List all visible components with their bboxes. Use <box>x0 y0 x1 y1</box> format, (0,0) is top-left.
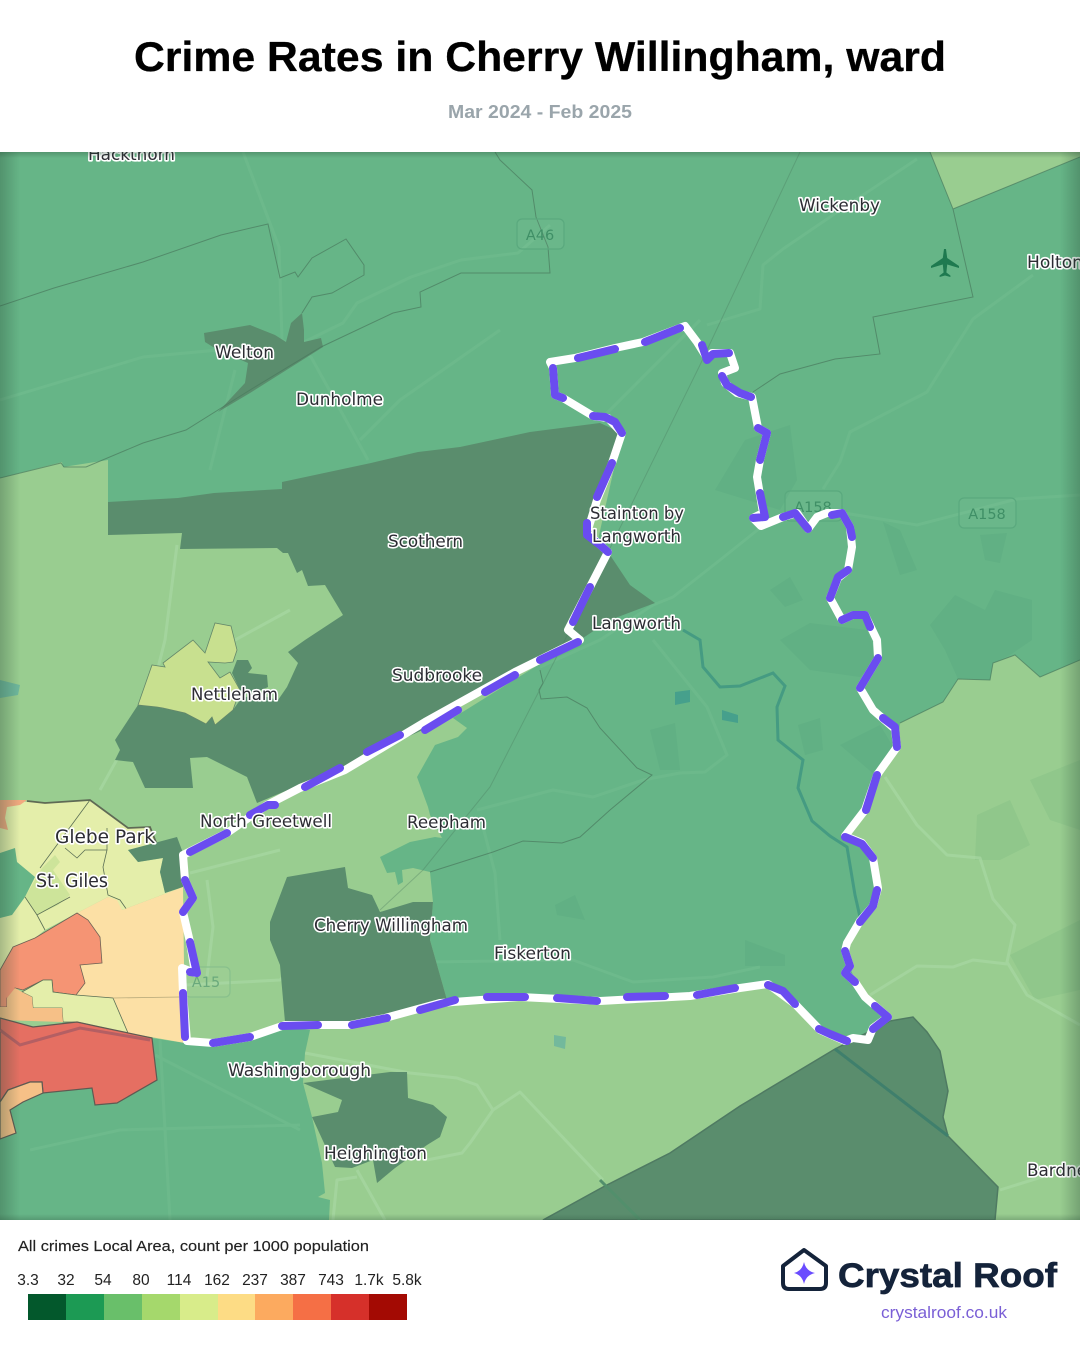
place labels: Dunholme <box>296 390 383 410</box>
place labels: Sudbrooke <box>392 666 482 686</box>
road sign: A46 <box>517 219 564 249</box>
choropleth area: Lincoln lower orange <box>0 1082 43 1139</box>
choropleth area: Lincoln pale yellow wards <box>0 800 183 970</box>
Lincoln outer border <box>27 800 157 845</box>
place labels: Glebe Park <box>55 826 155 848</box>
place labels: Cherry Willingham <box>314 916 468 936</box>
legend scale values: 5.8k <box>392 1272 422 1289</box>
legend scale values: 3.3 <box>17 1272 39 1289</box>
track in triangle <box>600 1180 640 1220</box>
legend scale values <box>17 1272 422 1289</box>
choropleth area: Lincoln orange ward <box>0 988 63 1022</box>
place labels: Langworth <box>592 614 681 634</box>
icon: airport plane <box>931 249 959 277</box>
place labels: Fiskerton <box>494 944 571 964</box>
legend colour bar <box>28 1294 407 1320</box>
legend scale values: 237 <box>242 1272 268 1289</box>
ward boundary <box>182 326 897 1043</box>
road sign: A158 east: A158 <box>968 507 1006 523</box>
cream ward line <box>113 997 180 998</box>
place labels: Reepham <box>407 813 486 833</box>
place labels: Scothern <box>388 532 463 552</box>
choropleth area: St Giles green patch <box>25 855 70 915</box>
place labels: Langworth <box>592 527 681 547</box>
pond south of ward <box>554 1035 566 1049</box>
place labels: Stainton by <box>590 504 684 524</box>
logo: Crystal Roof <box>781 1248 1058 1322</box>
road sign: A15: A15 <box>192 975 220 991</box>
choropleth area: Cherry Willingham <box>270 867 447 1025</box>
legend title: All crimes Local Area, count per 1000 population <box>18 1238 369 1255</box>
place labels: Welton <box>215 343 274 363</box>
place labels <box>36 145 1080 1181</box>
choropleth area: Lincoln teal ward <box>0 848 35 918</box>
legend scale values: 162 <box>204 1272 230 1289</box>
legend <box>17 1238 422 1320</box>
choropleth area: ward fields <box>555 425 1032 966</box>
subtitle: date range: Mar 2024 - Feb 2025 <box>448 101 632 122</box>
choropleth area: top-left orange sliver <box>0 800 27 830</box>
website url: crystalroof.co.uk <box>881 1304 1008 1322</box>
place labels: Nettleham <box>191 685 278 705</box>
legend scale values: 1.7k <box>354 1272 384 1289</box>
choropleth area: Nettleham <box>138 623 240 725</box>
road sign: A46: A46 <box>526 228 554 244</box>
brand name: Crystal Roof <box>838 1257 1058 1295</box>
legend scale values: 743 <box>318 1272 344 1289</box>
choropleth area: east field patches <box>975 760 1080 1000</box>
road sign: A158 east <box>959 498 1016 528</box>
pond on west edge <box>0 680 20 698</box>
roads <box>0 152 1080 1220</box>
place labels: Washingborough <box>228 1061 371 1081</box>
road sign: A158 north: A158 <box>794 500 832 516</box>
railway across triangle <box>835 1049 948 1136</box>
choropleth area: Lincoln dark ward <box>128 837 183 893</box>
choropleth area: low-crime green <box>0 152 1080 1041</box>
legend scale values: 114 <box>167 1272 192 1289</box>
choropleth area: Welton <box>204 313 323 412</box>
choropleth area: south-west green <box>0 1027 330 1220</box>
road sign: A15 <box>185 967 230 997</box>
legend scale values: 387 <box>280 1272 306 1289</box>
road sign: A158 north <box>785 491 842 521</box>
ponds near Langworth <box>675 690 738 723</box>
place labels: North Greetwell <box>200 812 332 832</box>
choropleth area: Lincoln red ward <box>0 1018 157 1105</box>
place labels: Wickenby <box>799 196 880 216</box>
Lincoln ward lines <box>25 800 127 930</box>
choropleth area: Lincoln salmon wards <box>0 913 102 1007</box>
choropleth area: Heighington and Washingborough <box>303 1072 447 1183</box>
legend scale values: 54 <box>94 1272 112 1289</box>
choropleth area: Lincoln pale band <box>22 980 128 1033</box>
river <box>683 630 860 917</box>
legend scale values: 80 <box>132 1272 150 1289</box>
icon: house with star <box>783 1250 826 1289</box>
map panel <box>0 152 1080 1220</box>
roads on light ground <box>100 545 1080 1220</box>
title: Crime Rates in Cherry Willingham, ward <box>134 33 946 80</box>
choropleth area: south-east dark triangle <box>543 1017 998 1220</box>
choropleth area: dark green Scothern and Sudbrooke <box>108 423 655 803</box>
railway through red ward <box>0 1028 150 1045</box>
place labels: St. Giles <box>36 870 108 892</box>
place labels: Heighington <box>324 1144 427 1164</box>
choropleth area: Lincoln cream wards <box>76 887 185 1043</box>
legend scale values: 32 <box>57 1272 75 1289</box>
boundary lines <box>0 152 1080 910</box>
